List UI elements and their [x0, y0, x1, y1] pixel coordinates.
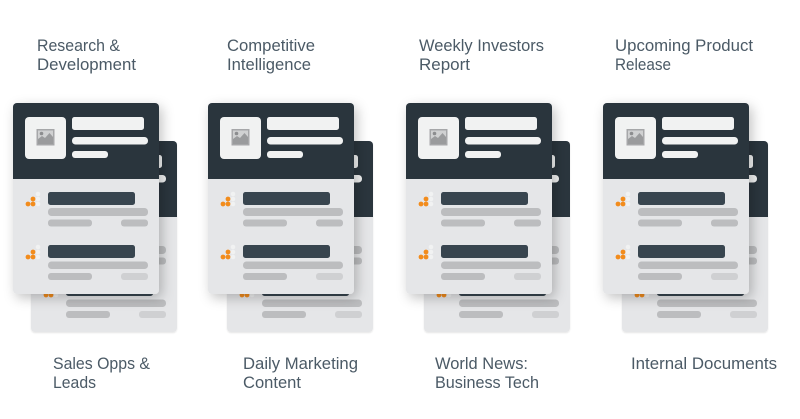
label: Internal Documents: Internal Documents — [631, 355, 777, 373]
stack: Weekly Investors Report / World News — [406, 103, 570, 332]
stack: Research & Development / Sales Opps & Leads — [13, 103, 177, 332]
front card: Upcoming Product Release — [603, 103, 749, 294]
back card: Internal Documents — [622, 141, 768, 332]
label: World News: Business Tech: World News: — [435, 355, 528, 373]
label: Sales Opps & Leads — [53, 355, 150, 392]
label: Competitive Intelligence: Competitive — [227, 37, 315, 55]
label: Research & Development — [37, 37, 136, 74]
label: Daily Marketing Content — [243, 355, 358, 392]
stack: Upcoming Product Release / Internal Documents — [603, 103, 768, 332]
label: Research & Development: Research & — [37, 37, 120, 55]
label: Research & Development: Development — [37, 56, 136, 74]
label: World News: Business Tech: Business Tech — [435, 374, 539, 392]
label: Upcoming Product Release — [615, 37, 753, 74]
label: Upcoming Product Release: Release — [615, 56, 671, 74]
back card: Sales Opps & Leads — [31, 141, 177, 332]
label: Competitive Intelligence: Intelligence — [227, 56, 311, 74]
label: Weekly Investors Report: Report — [419, 56, 470, 74]
label: Sales Opps & Leads: Leads — [53, 374, 96, 392]
label: Weekly Investors Report: Weekly Investors — [419, 37, 544, 55]
label: Daily Marketing Content: Content — [243, 374, 301, 392]
back card: Daily Marketing Content — [227, 141, 373, 332]
stack: Competitive Intelligence / Daily Marketing Content — [208, 103, 373, 332]
label: Upcoming Product Release: Upcoming Product — [615, 37, 753, 55]
front card: Competitive Intelligence — [208, 103, 354, 294]
back card: World News — [424, 141, 570, 332]
label: Weekly Investors Report — [419, 37, 544, 74]
front card: Weekly Investors Report — [406, 103, 552, 294]
label: Sales Opps & Leads: Sales Opps & — [53, 355, 150, 373]
label: World News: Business Tech — [435, 355, 539, 392]
label: Competitive Intelligence — [227, 37, 315, 74]
label: Daily Marketing Content: Daily Marketing — [243, 355, 358, 373]
front card: Research & Development — [13, 103, 159, 294]
